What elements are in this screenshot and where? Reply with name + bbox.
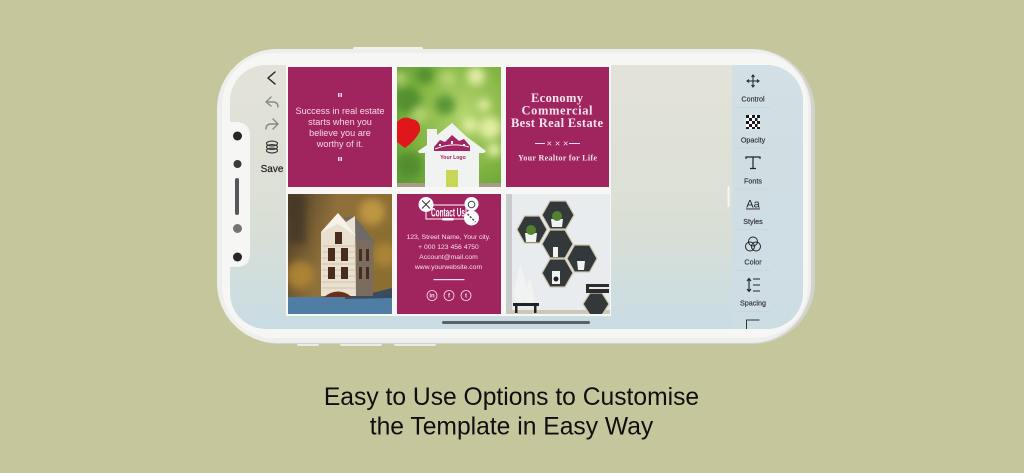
- contact details: 123, Street Name, Your city.: [406, 234, 491, 241]
- contact details: [406, 234, 491, 271]
- tool: color: Color: [744, 258, 762, 266]
- tool: styles: [743, 198, 763, 226]
- icon: undo: [266, 97, 278, 107]
- tool: styles: Aa: [746, 198, 761, 210]
- red heart: [397, 118, 420, 148]
- tile: headline: [506, 67, 609, 187]
- tile: quote: Success in real estate: [296, 106, 384, 116]
- tool: opacity: Opacity: [741, 136, 766, 144]
- tool: styles: Styles: [743, 217, 763, 226]
- tool: color: [744, 237, 762, 266]
- tool: fonts: [744, 157, 762, 186]
- left toolbar: [266, 72, 278, 153]
- caption: [324, 384, 699, 440]
- tile: quote: starts when you: [308, 117, 372, 127]
- infographic canvas: [217, 47, 815, 440]
- tool: cropped square: [746, 320, 760, 329]
- home indicator: [442, 321, 590, 324]
- right tool panel: [732, 65, 803, 329]
- tile: quote: [288, 67, 392, 187]
- tile: green photo with paper house: [393, 66, 501, 187]
- right toolbar: [735, 75, 770, 329]
- phone screen: [230, 65, 803, 329]
- icon: redo: [266, 119, 278, 129]
- caption: the Template in Easy Way: [370, 414, 654, 440]
- handle: rotate: [464, 197, 478, 211]
- white grid backing: [286, 65, 611, 316]
- paper house: [418, 123, 486, 187]
- tile: headline: × × ×: [547, 138, 568, 150]
- contact details: + 000 123 456 4750: [418, 244, 479, 251]
- tile: headline: Best Real Estate: [511, 116, 603, 130]
- phone body: [217, 47, 815, 346]
- social icons: [427, 290, 471, 300]
- handle: close: [418, 197, 434, 212]
- tool: opacity: [741, 115, 766, 144]
- tile: headline: Economy: [531, 91, 584, 105]
- handle: resize: [464, 210, 479, 226]
- contact details: www.yourwebsite.com: [414, 264, 482, 271]
- tile: contact: [397, 194, 501, 314]
- caption: Easy to Use Options to Customise: [324, 384, 699, 411]
- tile: headline: Your Realtor for Life: [518, 154, 597, 162]
- contact details: Account@mail.com: [419, 254, 478, 261]
- tool: control: [741, 75, 765, 104]
- tile: headline: Commercial: [522, 104, 593, 118]
- tile: contact: in: [429, 294, 435, 300]
- tool: spacing: Spacing: [740, 298, 766, 308]
- scroll handle: [728, 186, 730, 207]
- tool: control: Control: [741, 94, 765, 104]
- icon: back chevron: [268, 72, 275, 84]
- tile: model house photo: [286, 194, 397, 314]
- contact us heading with selection box: Contact Us: [431, 208, 465, 220]
- tile: hexagon shelves photo: [506, 194, 610, 315]
- tile: quote: believe you are: [309, 128, 371, 138]
- tool: spacing: [740, 278, 766, 308]
- icon: layers: [266, 141, 278, 153]
- tile: contact: t: [465, 294, 467, 300]
- tile: contact: f: [448, 294, 451, 300]
- logo: Your Logo: [440, 155, 466, 161]
- tool: fonts: Fonts: [744, 176, 762, 186]
- save label: Save: [261, 164, 284, 175]
- left notch panel with sensors: [225, 122, 250, 267]
- tile: quote: worthy of it.: [316, 139, 363, 149]
